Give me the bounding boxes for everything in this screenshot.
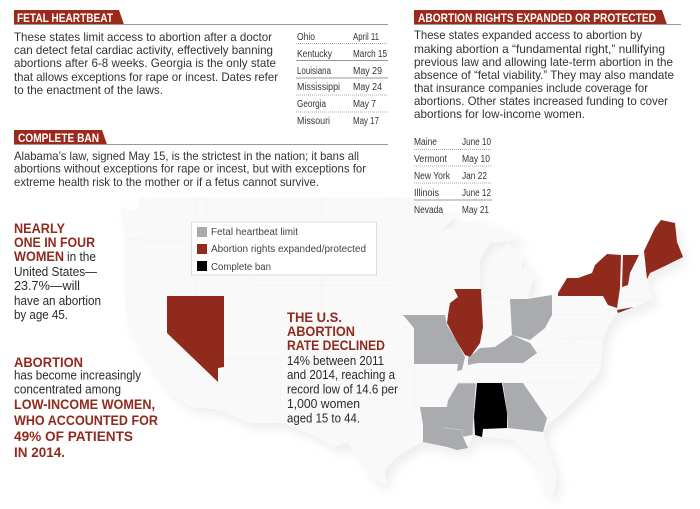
callout: one in four women: ONE IN FOUR xyxy=(14,235,95,250)
text: complete ban description: extreme health risk to the mother or if a fetus cannot survive. xyxy=(14,175,319,189)
callout: one in four women: by age 45. xyxy=(14,307,68,322)
section header: abortion rights expanded or protected: ABORTION RIGHTS EXPANDED OR PROTECTED xyxy=(418,13,656,25)
callout: one in four women: WOMEN xyxy=(14,249,64,264)
text: complete ban description: abortions without exceptions for rape or incest, but with exceptions for xyxy=(14,162,366,176)
table: fetal heartbeat states: Georgia xyxy=(297,99,326,110)
text: complete ban description: Alabama’s law, signed May 15, is the strictest in the nation; it bans all xyxy=(14,149,359,163)
callout: low-income women: IN 2014. xyxy=(14,445,65,460)
state: Louisiana xyxy=(420,407,468,450)
table: abortion rights states: May 10 xyxy=(462,154,490,165)
callout: low-income women: has become increasingly xyxy=(14,368,141,382)
table: fetal heartbeat states: Mississippi xyxy=(297,82,340,93)
text: fetal heartbeat description: that allows exceptions for rape or incest. Dates refer xyxy=(14,70,278,84)
callout: low-income women: ABORTION xyxy=(14,355,83,370)
callout: abortion rate declined: 1,000 women xyxy=(287,396,360,411)
callout: low-income women: WHO ACCOUNTED FOR xyxy=(14,413,158,428)
callout: abortion rate declined: aged 15 to 44. xyxy=(287,410,360,426)
state: Georgia xyxy=(503,383,547,432)
map of the United States xyxy=(120,198,688,501)
state: Illinois xyxy=(447,289,483,357)
state: Kentucky xyxy=(468,335,537,365)
callout: low-income women xyxy=(14,355,158,460)
table: abortion rights states: Jan 22 xyxy=(462,171,487,182)
text: fetal heartbeat description: These states limit access to abortion after a doctor xyxy=(14,30,272,44)
callout: one in four women: United States— xyxy=(14,264,97,279)
table: fetal heartbeat states: May 7 xyxy=(353,99,376,110)
callout: abortion rate declined: RATE DECLINED xyxy=(287,338,385,353)
callout: abortion rate declined: 14% between 2011 xyxy=(287,353,384,368)
text: abortion rights description: absence of “fetal viability.” They may also mandate xyxy=(414,68,674,82)
table: abortion rights states: Maine xyxy=(414,137,437,148)
text: abortion rights description: abortions. Other states increased funding to cover xyxy=(414,94,668,108)
text: fetal heartbeat description: can detect fetal cardiac activity, effectively banning xyxy=(14,43,273,57)
legend: Fetal heartbeat limit xyxy=(211,227,298,238)
callout: one in four women: have an abortion xyxy=(14,293,101,308)
state: Missouri xyxy=(403,315,465,371)
table: abortion rights states: Vermont xyxy=(414,154,447,165)
state: Vermont xyxy=(622,255,639,287)
section header: fetal heartbeat: FETAL HEARTBEAT xyxy=(17,13,113,25)
text: abortion rights description: previous law and allowing late-term abortion in the xyxy=(414,55,673,69)
callout: abortion rate declined: ABORTION xyxy=(287,324,355,339)
table: fetal heartbeat states: April 11 xyxy=(353,32,379,43)
table: fetal heartbeat states: Missouri xyxy=(297,116,330,127)
section header: fetal heartbeat xyxy=(14,10,388,25)
callout: low-income women: LOW-INCOME WOMEN, xyxy=(14,397,155,412)
callout: low-income women: 49% OF PATIENTS xyxy=(14,429,133,444)
table: fetal heartbeat states: March 15 xyxy=(353,49,387,60)
callout: low-income women: concentrated among xyxy=(14,382,121,396)
table: abortion rights states: June 10 xyxy=(462,137,491,148)
state: Nevada xyxy=(167,296,224,382)
callout: abortion rate declined: record low of 14.6 per xyxy=(287,382,399,396)
table: fetal heartbeat states: May 29 xyxy=(353,66,382,77)
table: fetal heartbeat states xyxy=(296,32,388,127)
text: abortion rights description xyxy=(414,28,674,121)
callout: one in four women xyxy=(14,221,101,322)
text: abortion rights description: that insurance companies include coverage for xyxy=(414,81,648,95)
legend: Complete ban xyxy=(211,262,271,273)
legend: Abortion rights expanded/protected xyxy=(211,244,366,255)
callout: abortion rate declined xyxy=(287,310,399,426)
table: fetal heartbeat states: May 17 xyxy=(353,116,379,127)
state: Maine xyxy=(644,220,683,279)
table: abortion rights states xyxy=(414,137,492,216)
state: New York xyxy=(558,254,634,313)
text: fetal heartbeat description: to the enactment of the laws. xyxy=(14,83,163,97)
table: abortion rights states: June 12 xyxy=(462,188,491,199)
table: abortion rights states: New York xyxy=(414,171,451,182)
text: fetal heartbeat description: abortions after 6-8 weeks. Georgia is the only state xyxy=(14,56,276,70)
table: fetal heartbeat states: Louisiana xyxy=(297,66,331,77)
callout: abortion rate declined: and 2014, reaching a xyxy=(287,367,396,382)
text: abortion rights description: abortions for low-income women. xyxy=(414,107,585,121)
text: abortion rights description: These states expanded access to abortion by xyxy=(414,28,642,42)
table: fetal heartbeat states: Kentucky xyxy=(297,49,332,60)
callout: abortion rate declined: THE U.S. xyxy=(287,310,342,325)
text: abortion rights description: making abortion a “fundamental right,” nullifying xyxy=(414,42,665,56)
table: fetal heartbeat states: Ohio xyxy=(297,32,315,43)
table: fetal heartbeat states: May 24 xyxy=(353,82,382,93)
state: Mississippi xyxy=(443,383,476,437)
section header: complete ban: COMPLETE BAN xyxy=(18,133,99,145)
state: Ohio xyxy=(510,295,552,340)
callout: one in four women: NEARLY xyxy=(14,221,65,236)
table: abortion rights states: Nevada xyxy=(414,205,443,216)
callout: one in four women: in the xyxy=(67,249,96,264)
text: fetal heartbeat description xyxy=(14,30,278,97)
table: abortion rights states: May 21 xyxy=(462,205,489,216)
legend xyxy=(192,222,376,275)
callout: one in four women: 23.7%—will xyxy=(14,278,80,293)
table: abortion rights states: Illinois xyxy=(414,188,439,199)
text: complete ban description xyxy=(14,149,366,189)
section header: complete ban xyxy=(14,130,388,145)
state: Alabama xyxy=(474,383,507,437)
